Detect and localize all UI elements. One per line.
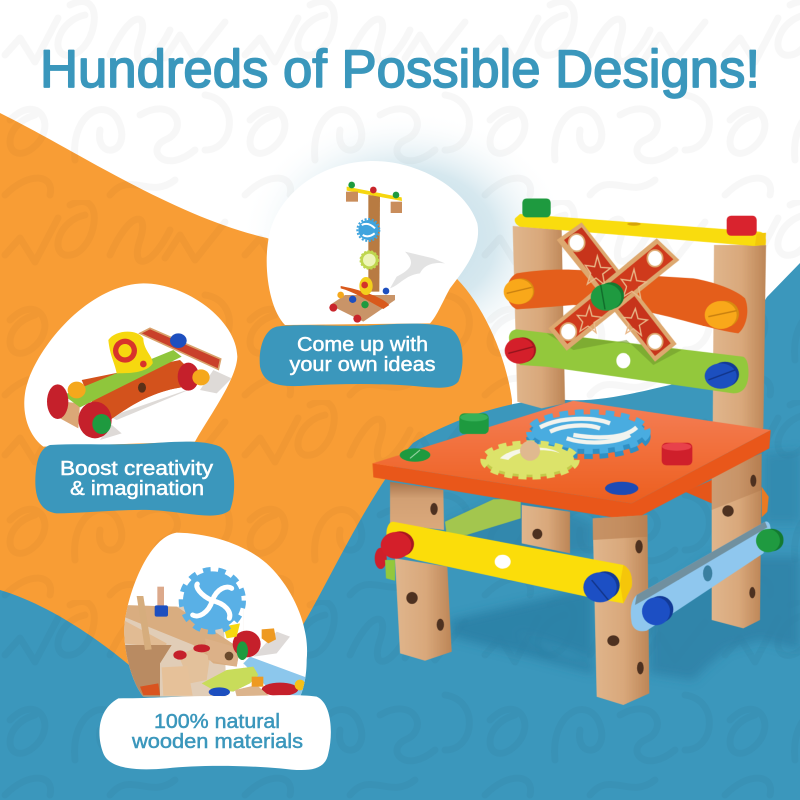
icon: swirl gear: [181, 569, 244, 632]
blue swirl gear: [529, 412, 648, 456]
text: boost creativity & imagination: & imagination: [70, 478, 204, 500]
green gear: [483, 441, 577, 477]
title: Hundreds of Possible Designs!: [40, 40, 760, 99]
yellow front rail: [375, 522, 632, 603]
panel: come up with your own ideas: [260, 161, 478, 388]
text: 100% natural wooden materials: 100% natural: [154, 711, 280, 733]
photo bubble: lion car: [24, 283, 237, 447]
text: come up with your own ideas: your own ideas: [290, 354, 436, 376]
blue wave: [0, 263, 800, 800]
text: come up with your own ideas: [290, 334, 436, 376]
text: 100% natural wooden materials: [131, 711, 303, 753]
label: boost creativity: [35, 442, 234, 516]
photo bubble: wooden parts: [123, 533, 313, 700]
text: boost creativity & imagination: [60, 458, 213, 500]
panel: natural wooden materials: [99, 533, 331, 770]
photo: wooden toy chair: [373, 198, 800, 705]
orange back rail: [507, 270, 747, 333]
back legs: [522, 453, 769, 628]
text: come up with your own ideas: Come up with: [297, 334, 428, 356]
light blue rail: [631, 522, 784, 631]
crossed star boards: [548, 222, 679, 362]
backrest posts: [513, 226, 766, 437]
panel: boost creativity: [24, 283, 237, 516]
yellow top rail: [515, 198, 766, 246]
orange wave: [0, 113, 512, 720]
label: come up with your own ideas: [260, 324, 463, 388]
seat screws: [400, 413, 692, 495]
text: boost creativity & imagination: Boost creativity: [60, 458, 213, 480]
green back rail: [509, 329, 748, 393]
green rear rail: [445, 498, 521, 535]
label: natural wooden materials: [99, 695, 331, 770]
front legs: [390, 482, 649, 705]
floor shadows: [443, 450, 800, 680]
back rail screws: [504, 278, 739, 389]
photo bubble: tower build: [267, 161, 478, 325]
seat: [373, 401, 771, 521]
text: 100% natural wooden materials: wooden materials: [131, 731, 303, 753]
